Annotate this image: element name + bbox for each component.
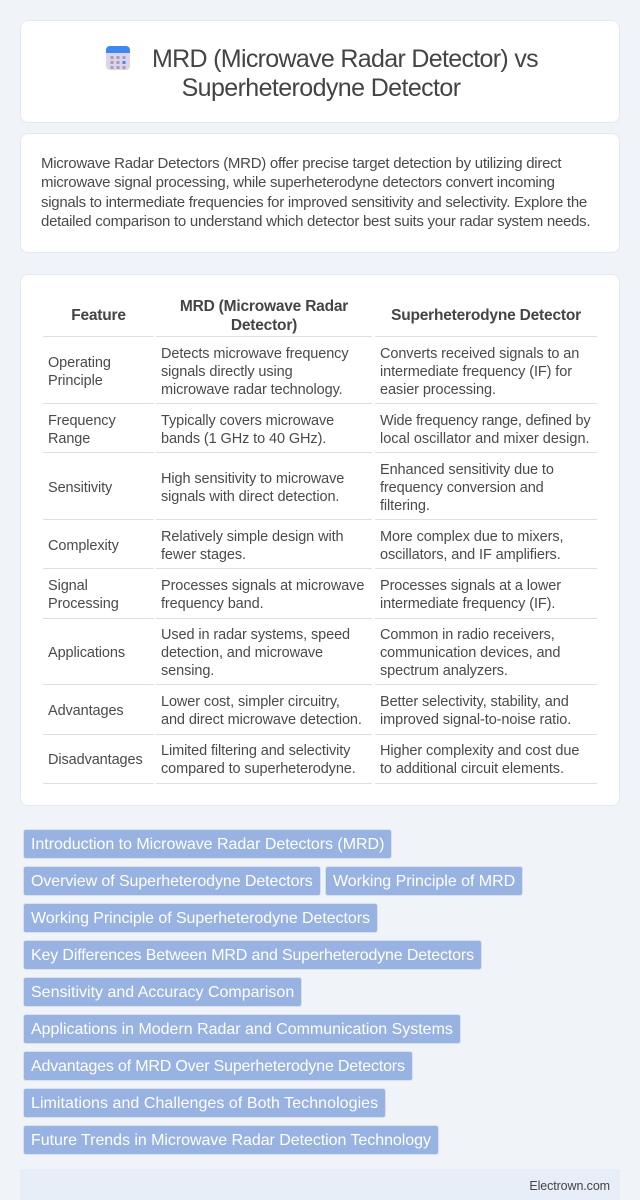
panel: comparison table: Advantages — [48, 703, 124, 719]
panel: comparison table: Better selectivity, stability, and — [380, 694, 569, 710]
panel: comparison table: Feature — [71, 307, 126, 324]
panel: comparison table: Wide frequency range, defined by — [380, 413, 590, 429]
tag: limitations: Limitations and Challenges of Both Technologies — [31, 1095, 378, 1112]
footer — [20, 1169, 620, 1200]
panel: comparison table: Relatively simple design with — [161, 529, 343, 545]
panel: comparison table: improved signal-to-noise ratio. — [380, 712, 571, 728]
text block: introduction: detailed comparison to understand which detector best suits your radar system needs. — [41, 213, 590, 230]
row: signal processing — [43, 578, 597, 619]
tag: introduction: Introduction to Microwave Radar Detectors (MRD) — [31, 836, 384, 853]
text block: introduction — [41, 155, 590, 230]
panel: comparison table: spectrum analyzers. — [380, 663, 508, 679]
tag: sensitivity — [23, 977, 302, 1007]
tag: working principle of MRD: Working Principle of MRD — [333, 873, 515, 890]
panel: comparison table: local oscillator and mixer design. — [380, 431, 590, 447]
tag: sensitivity: Sensitivity and Accuracy Comparison — [31, 984, 294, 1001]
panel: comparison table: Range — [48, 431, 90, 447]
row: frequency range — [43, 413, 597, 453]
panel: comparison table: High sensitivity to microwave — [161, 471, 344, 487]
panel: comparison table: intermediate frequency (IF). — [380, 596, 555, 612]
panel: comparison table: Processes signals at microwave — [161, 578, 364, 594]
panel: comparison table: Signal — [48, 578, 88, 594]
panel: comparison table: signals with direct detection. — [161, 489, 339, 505]
panel: comparison table: Sensitivity — [48, 480, 112, 496]
panel: comparison table: frequency conversion and — [380, 480, 544, 496]
tag: applications — [23, 1014, 461, 1044]
row: disadvantages — [43, 743, 597, 784]
row: advantages — [43, 694, 597, 735]
footer text: Electrown.com — [529, 1179, 610, 1193]
panel: comparison table: easier processing. — [380, 382, 496, 398]
tag: key differences: Key Differences Between MRD and Superheterodyne Detectors — [31, 947, 474, 964]
panel: comparison table: communication devices, and — [380, 645, 560, 661]
text block: introduction: Microwave Radar Detectors (MRD) offer precise target detection by utilizing direct — [41, 155, 561, 172]
title — [152, 45, 538, 102]
panel: comparison table: signals directly using — [161, 364, 293, 380]
panel: comparison table: Detector) — [231, 317, 297, 334]
row: complexity — [43, 529, 597, 569]
title: MRD (Microwave Radar Detector) vs — [152, 45, 538, 73]
text block: introduction: microwave signal processing, while superheterodyne detectors convert incoming — [41, 174, 555, 191]
text block: introduction: signals to intermediate frequencies for improved sensitivity and selectivity. Explore the — [41, 194, 587, 211]
tag: key differences — [23, 940, 482, 970]
panel: comparison table: and direct microwave detection. — [161, 712, 362, 728]
panel: comparison table: Lower cost, simpler circuitry, — [161, 694, 340, 710]
panel: comparison table: filtering. — [380, 498, 430, 514]
panel: comparison table: Typically covers microwave — [161, 413, 334, 429]
panel: comparison table: Converts received signals to an — [380, 346, 579, 362]
tag: working principle of MRD — [325, 866, 523, 896]
row: operating principle — [43, 346, 597, 404]
panel: comparison table: compared to superheterodyne. — [161, 761, 356, 777]
panel: comparison table: More complex due to mixers, — [380, 529, 563, 545]
title: Superheterodyne Detector — [182, 74, 460, 102]
panel: comparison table: Common in radio receivers, — [380, 627, 555, 643]
panel: comparison table: Processing — [48, 596, 119, 612]
panel: comparison table: to additional circuit elements. — [380, 761, 564, 777]
panel: comparison table: intermediate frequency (IF) for — [380, 364, 572, 380]
panel: comparison table: bands (1 GHz to 40 GHz). — [161, 431, 326, 447]
tag: future trends: Future Trends in Microwave Radar Detection Technology — [31, 1132, 431, 1149]
tag: advantages — [23, 1051, 413, 1081]
panel: comparison table: Enhanced sensitivity due to — [380, 462, 554, 478]
panel: introduction — [20, 133, 620, 253]
panel: comparison table: fewer stages. — [161, 547, 246, 563]
panel: comparison table: Detects microwave frequency — [161, 346, 348, 362]
table header — [43, 298, 597, 337]
tag: overview: Overview of Superheterodyne Detectors — [31, 873, 313, 890]
row: applications — [43, 627, 597, 685]
panel: comparison table: Used in radar systems, speed — [161, 627, 350, 643]
panel: comparison table: Frequency — [48, 413, 116, 429]
icon: calendar — [106, 46, 130, 70]
tag: overview — [23, 866, 321, 896]
tag: limitations — [23, 1088, 386, 1118]
panel: comparison table: sensing. — [161, 663, 214, 679]
panel: comparison table: Higher complexity and cost due — [380, 743, 579, 759]
panel: title card — [20, 20, 620, 123]
panel: comparison table: frequency band. — [161, 596, 264, 612]
tag: introduction — [23, 829, 392, 859]
panel: comparison table: Superheterodyne Detector — [391, 307, 581, 324]
panel: comparison table: MRD (Microwave Radar — [180, 298, 348, 315]
panel: comparison table: oscillators, and IF amplifiers. — [380, 547, 561, 563]
panel: comparison table: Limited filtering and selectivity — [161, 743, 350, 759]
tag: working principle of superheterodyne — [23, 903, 378, 933]
panel: comparison table: Applications — [48, 645, 125, 661]
tag: advantages: Advantages of MRD Over Superheterodyne Detectors — [31, 1058, 405, 1075]
tag: working principle of superheterodyne: Working Principle of Superheterodyne Detectors — [31, 910, 370, 927]
tag: applications: Applications in Modern Radar and Communication Systems — [31, 1021, 453, 1038]
panel: comparison table: Disadvantages — [48, 752, 143, 768]
panel: comparison table: detection, and microwave — [161, 645, 323, 661]
panel: comparison table — [20, 274, 620, 806]
panel: comparison table: Principle — [48, 373, 103, 389]
panel: comparison table: Complexity — [48, 538, 119, 554]
panel: comparison table: Operating — [48, 355, 111, 371]
panel: comparison table: microwave radar technology. — [161, 382, 343, 398]
row: sensitivity — [43, 462, 597, 520]
tag: future trends — [23, 1125, 439, 1155]
panel: comparison table: Processes signals at a lower — [380, 578, 561, 594]
